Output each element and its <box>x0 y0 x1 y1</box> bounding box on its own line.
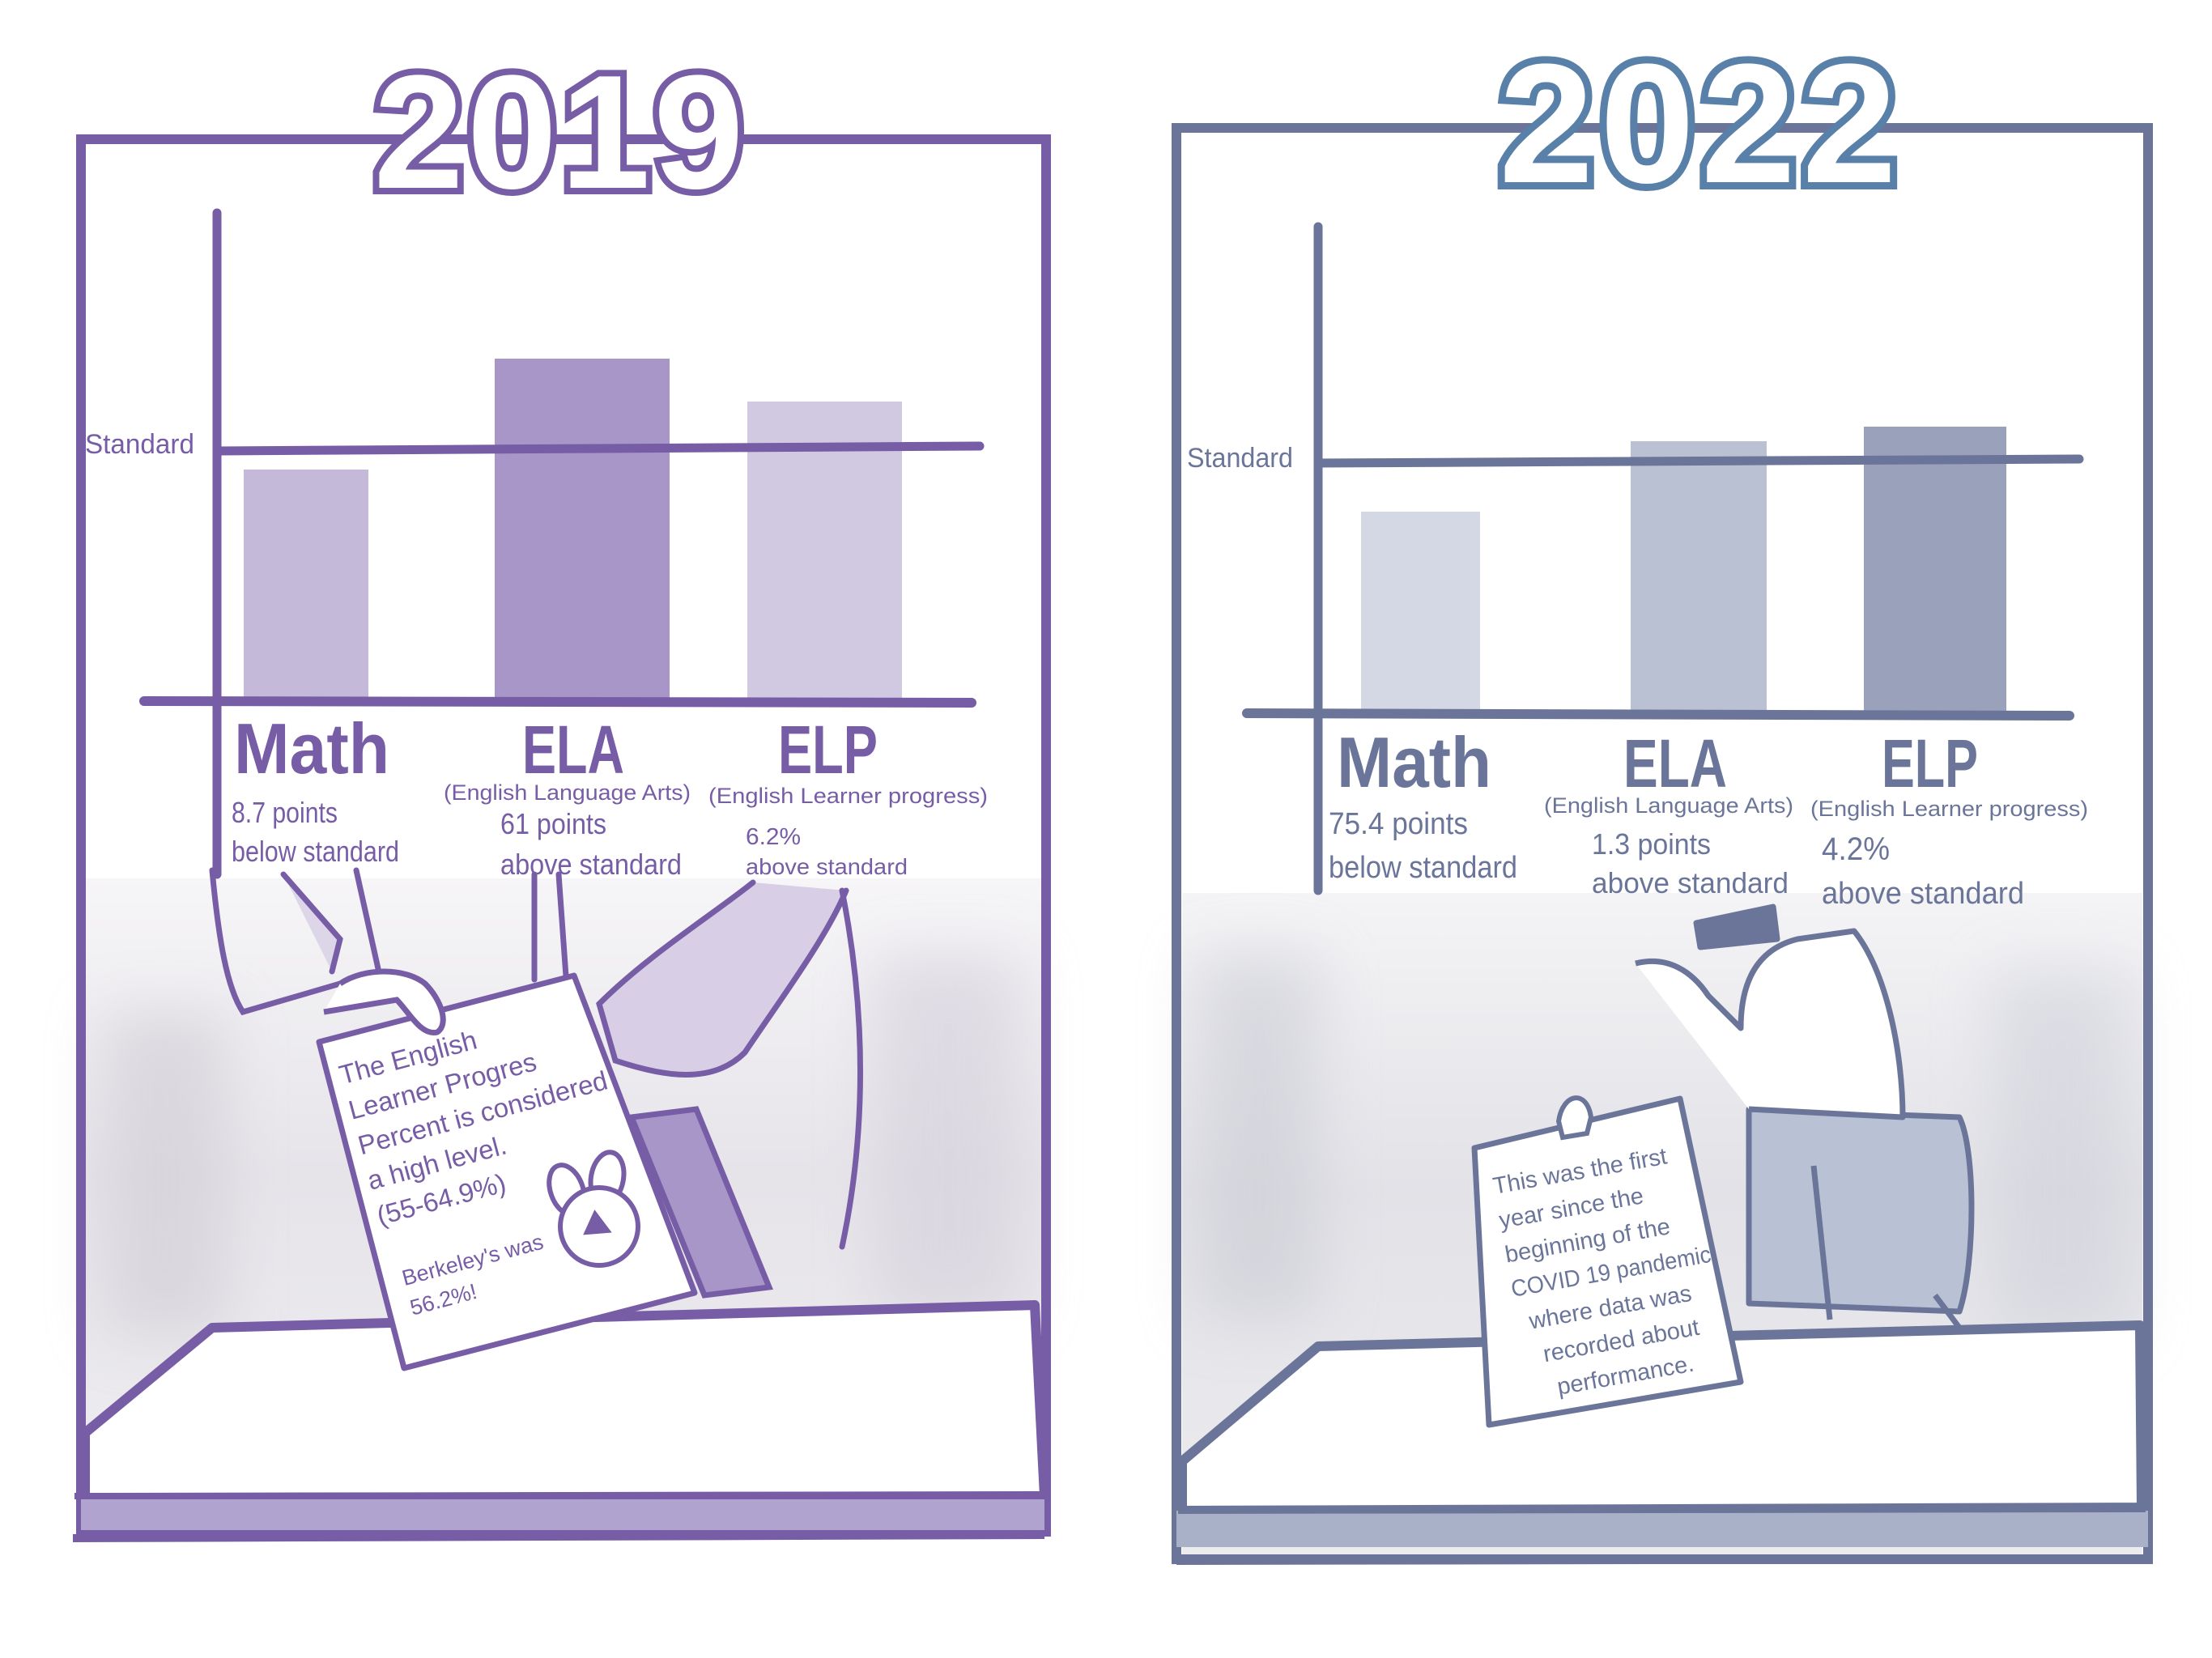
icon: hand holding note <box>324 971 443 1033</box>
note: COVID 19: year since the <box>1497 1183 1645 1234</box>
desk 2019 <box>73 1305 1044 1538</box>
title: 2022: 2022 <box>1499 28 1904 219</box>
label: above standard ELA 2019: above standard <box>500 848 682 881</box>
panel: 2022 <box>1176 28 2148 1561</box>
label: 75.4 points: 75.4 points <box>1329 807 1468 841</box>
frame 2019 <box>81 139 1046 1532</box>
label: ELP 2019: ELP <box>778 712 878 788</box>
note: English Learner Progress: Berkeley's was <box>399 1230 546 1290</box>
bar: Math 2022 <box>1361 512 1480 712</box>
photo background 2022 <box>1182 893 2142 1555</box>
label: ELA 2019: ELA <box>522 712 624 788</box>
bar: ELP 2019 <box>747 402 902 702</box>
note: English Learner Progress: Percent is considered <box>355 1065 610 1160</box>
label: English Learner progress 2022: (English Learner progress) <box>1810 797 2088 821</box>
note: English Learner Progress: (55-64.9%) <box>373 1167 509 1231</box>
frame 2022 <box>1176 128 2148 1559</box>
icon: rabbit <box>542 1150 638 1265</box>
labels 2019 <box>232 708 988 881</box>
note: English Learner Progress: Learner Progres <box>345 1046 539 1125</box>
bar: ELA 2022 <box>1631 441 1767 712</box>
bar: ELP 2022 <box>1864 427 2006 712</box>
note: English Learner Progress: a high level. <box>364 1129 509 1196</box>
label: above standard ELP 2019: above standard <box>746 854 908 879</box>
label: above standard ELP 2022: above standard <box>1822 877 2024 911</box>
label: 4.2%: 4.2% <box>1822 831 1890 867</box>
label: 6.2%: 6.2% <box>746 824 801 850</box>
bar chart 2019 <box>85 213 980 874</box>
illustration: student holding note <box>212 870 860 1295</box>
illustration: backpack on chair <box>1636 907 1972 1328</box>
note: COVID 19: where data was <box>1526 1281 1694 1335</box>
bar chart 2022 <box>1187 227 2079 891</box>
label: above standard ELA 2022: above standard <box>1592 866 1789 899</box>
bar: ELA 2019 <box>495 359 670 702</box>
note: COVID 19: performance. <box>1555 1351 1696 1401</box>
note: COVID 19 <box>1474 1098 1741 1425</box>
label: below standard 2019: below standard <box>232 835 399 868</box>
title: 2019: 2019 <box>374 42 747 223</box>
label: Math 2019: Math <box>234 708 389 789</box>
label: Standard 2022: Standard <box>1187 443 1293 474</box>
labels 2022 <box>1329 722 2088 911</box>
label: ELA 2022: ELA <box>1623 725 1727 801</box>
desk 2022 <box>1176 1325 2148 1561</box>
note: COVID 19: recorded about <box>1541 1315 1701 1367</box>
label: Standard: Standard <box>85 429 194 460</box>
panel: 2019 <box>73 42 1046 1538</box>
note: English Learner Progress: 56.2%! <box>407 1279 479 1320</box>
note: COVID 19: COVID 19 pandemic <box>1509 1242 1713 1303</box>
label: 8.7 points: 8.7 points <box>232 796 338 829</box>
label: English Language Arts 2022: (English Language Arts) <box>1544 793 1793 818</box>
label: English Learner progress 2019: (English Learner progress) <box>708 784 988 808</box>
note: English Learner Progress <box>319 971 695 1368</box>
label: 1.3 points: 1.3 points <box>1592 827 1711 861</box>
label: 61 points: 61 points <box>500 807 606 840</box>
bar: Math 2019 <box>244 470 368 702</box>
label: below standard 2022: below standard <box>1329 851 1517 885</box>
label: ELP 2022: ELP <box>1882 725 1978 801</box>
label: English Language Arts 2019: (English Language Arts) <box>444 780 691 805</box>
note: COVID 19: beginning of the <box>1503 1214 1672 1269</box>
photo background 2019 <box>86 878 1041 1534</box>
label: Math 2022: Math <box>1337 722 1491 802</box>
note: COVID 19: This was the first <box>1491 1144 1669 1200</box>
note: English Learner Progress: The English <box>336 1025 480 1090</box>
